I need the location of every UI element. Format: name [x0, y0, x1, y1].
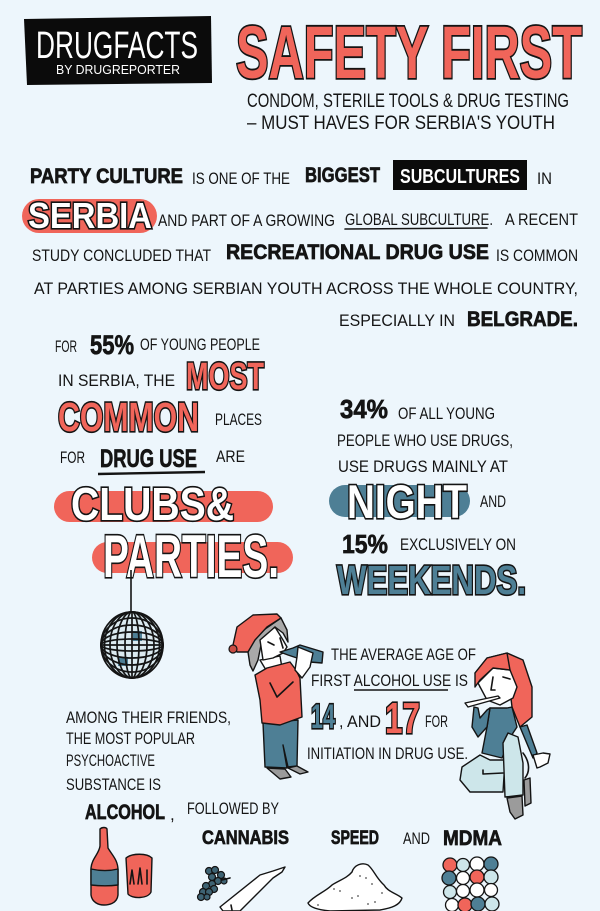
text block: 55% most common places: 55%	[90, 330, 134, 360]
fringe	[475, 653, 510, 687]
illustration: woman smoking	[460, 653, 550, 819]
icon: bottle and glass	[91, 828, 152, 905]
line: Serbia: AND PART OF A GROWING	[158, 211, 335, 230]
torso	[255, 662, 302, 725]
line: party culture	[30, 160, 552, 190]
text block: 34% at night, 15% weekends: NIGHT	[347, 475, 467, 528]
hand	[533, 753, 550, 768]
highlight: clubs & parties: PARTIES.	[103, 523, 279, 590]
front shoe	[507, 796, 523, 819]
line: Serbia	[22, 195, 578, 236]
intro paragraph	[22, 160, 578, 331]
logo: Drugfacts by Drugreporter: DRUGFACTS	[36, 25, 198, 67]
text block: 34% at night, 15% weekends: USE DRUGS MAINLY AT	[338, 457, 508, 476]
line: Belgrade: BELGRADE.	[467, 308, 578, 331]
line: Serbia: GLOBAL SUBCULTURE.	[345, 210, 493, 229]
text block: among their friends: AMONG THEIR FRIENDS,	[66, 708, 231, 727]
line: Belgrade	[339, 308, 578, 331]
text block: 55% most common places	[55, 330, 264, 474]
logo: Drugfacts by Drugreporter: BY DRUGREPORTER	[56, 62, 180, 77]
text block: 34% at night, 15% weekends: 34%	[340, 394, 388, 424]
line: recreational drug use: STUDY CONCLUDED THAT	[32, 246, 211, 265]
text block: average age: , AND	[339, 712, 381, 731]
subtitle	[247, 91, 569, 134]
line: party culture: IN	[537, 169, 552, 188]
back hair	[475, 653, 532, 727]
text block: 55% most common places: PLACES	[215, 410, 262, 429]
text block: 34% at night, 15% weekends: OF ALL YOUNG	[398, 404, 495, 423]
text block: 55% most common places: OF YOUNG PEOPLE	[140, 335, 260, 354]
hand and arm	[295, 647, 313, 678]
label: speed: SPEED	[331, 828, 379, 849]
text block: among their friends	[66, 708, 279, 824]
line: Belgrade: ESPECIALLY IN	[339, 311, 455, 330]
text block: average age: 14	[311, 698, 335, 736]
text block: among their friends: PSYCHOACTIVE	[66, 751, 155, 770]
line: recreational drug use: IS COMMON	[496, 246, 578, 265]
icon: powder pile	[308, 864, 402, 911]
text block: average age: FIRST ALCOHOL USE IS	[311, 671, 468, 690]
text block: average age: INITIATION IN DRUG USE.	[307, 744, 468, 763]
second shoe	[524, 778, 531, 806]
highlight: clubs & parties: CLUBS&	[71, 478, 234, 530]
line: recreational drug use: RECREATIONAL DRUG USE	[226, 241, 489, 264]
text block: among their friends: FOLLOWED BY	[187, 799, 279, 818]
label: and: AND	[403, 829, 430, 848]
line: Serbia: SERBIA	[28, 195, 152, 236]
text block: among their friends: ,	[170, 805, 175, 824]
vertical leg	[503, 733, 523, 797]
logo: Drugfacts by Drugreporter	[24, 16, 212, 85]
hat	[233, 614, 281, 652]
text block: 55% most common places: IN SERBIA, THE	[58, 371, 175, 390]
text block: 55% most common places: FOR	[55, 337, 77, 356]
label: MDMA: MDMA	[443, 827, 502, 850]
text block: 34% at night, 15% weekends	[329, 394, 526, 603]
label: cannabis: CANNABIS	[202, 828, 289, 849]
shoes	[267, 766, 308, 779]
line: recreational drug use	[32, 241, 578, 265]
text block: average age: 17	[385, 694, 420, 743]
horizontal leg	[460, 755, 505, 792]
joint	[465, 696, 500, 707]
back of leg	[523, 753, 529, 778]
line: at parties: AT PARTIES AMONG SERBIAN YOUTH ACROSS THE WHOLE COUNTRY,	[34, 279, 578, 298]
legs	[263, 720, 298, 768]
text block: 34% at night, 15% weekends: PEOPLE WHO USE DRUGS,	[337, 431, 513, 450]
text block: 34% at night, 15% weekends: EXCLUSIVELY ON	[400, 535, 516, 554]
bottle	[280, 645, 323, 663]
highlight: clubs & parties	[54, 478, 293, 590]
text block: 34% at night, 15% weekends: 15%	[342, 529, 388, 559]
face	[260, 627, 287, 660]
icon: cannabis bud and joint	[198, 866, 285, 911]
text block: among their friends: ALCOHOL	[85, 801, 165, 824]
text block: among their friends: SUBSTANCE IS	[66, 775, 161, 794]
text block: 55% most common places: DRUG USE	[100, 445, 197, 473]
line: party culture: IS ONE OF THE	[192, 169, 290, 188]
text block: average age	[307, 645, 476, 763]
text block: 34% at night, 15% weekends: WEEKENDS.	[337, 557, 526, 603]
illustration: person drinking	[229, 614, 323, 779]
right arm	[520, 725, 537, 758]
icon: disco ball	[101, 570, 163, 678]
text block: 34% at night, 15% weekends: AND	[480, 492, 506, 511]
text block: among their friends: THE MOST POPULAR	[66, 729, 195, 748]
left arm	[472, 707, 490, 737]
face	[478, 668, 517, 705]
text block: 55% most common places: ARE	[216, 447, 245, 466]
subtitle: – MUST HAVES FOR SERBIA'S YOUTH	[247, 113, 555, 134]
line: Serbia: A RECENT	[505, 210, 578, 229]
text block: 55% most common places: FOR	[60, 448, 85, 467]
hair	[248, 618, 288, 671]
text block: average age: THE AVERAGE AGE OF	[331, 645, 476, 664]
torso	[482, 707, 517, 758]
icon: MDMA pills	[442, 857, 499, 911]
text block: average age: FOR	[425, 712, 448, 731]
text block: 55% most common places: MOST	[186, 356, 264, 398]
line: party culture: SUBCULTURES	[400, 166, 520, 188]
collar	[260, 656, 282, 670]
line: party culture: BIGGEST	[305, 164, 380, 187]
text block: 55% most common places: COMMON	[58, 394, 199, 440]
line: party culture: PARTY CULTURE	[30, 165, 183, 188]
